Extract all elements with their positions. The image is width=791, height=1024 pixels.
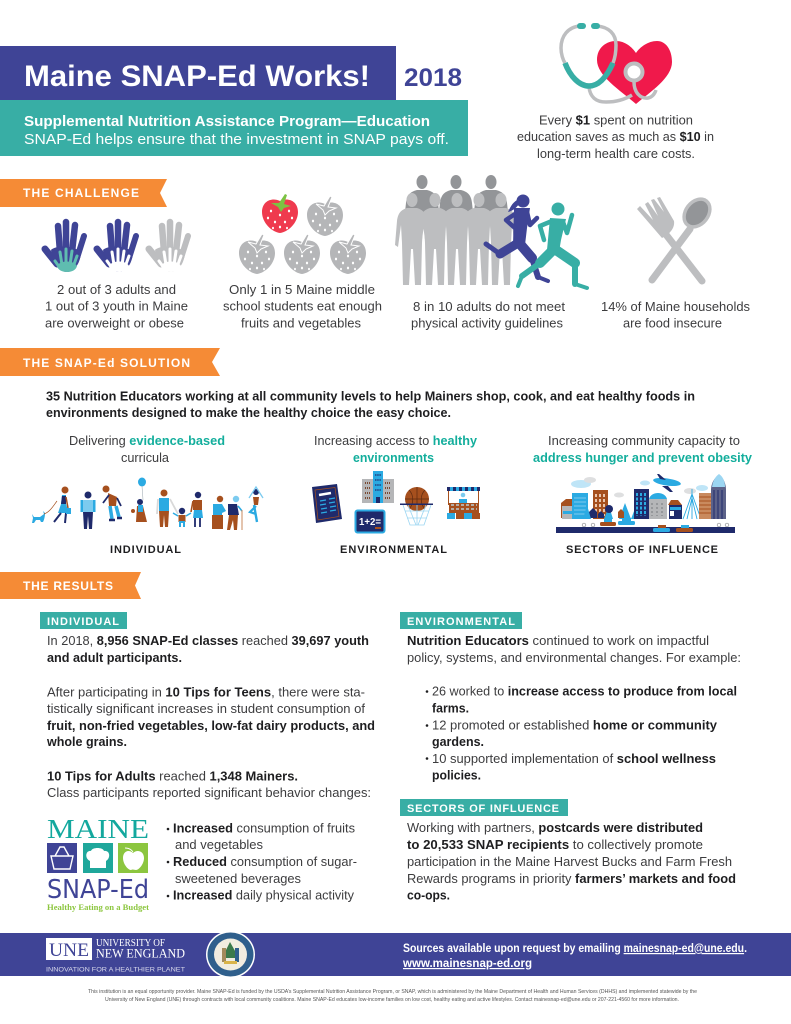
logo: University of New England: INNOVATION FOR A HEALTHIER PLANET [46, 967, 185, 974]
school building [362, 471, 394, 503]
text: class reach: and adult participants. [47, 651, 182, 665]
icon: strawberries [239, 194, 366, 274]
girl with balloon [131, 478, 147, 522]
text: postcards [407, 821, 736, 902]
caption: overweight: 1 out of 3 youth in Maine [45, 300, 188, 314]
text: teens program: tistically significant increases in student consumption of [47, 702, 366, 716]
logo: University of New England: UNE [49, 940, 89, 961]
list: environmental examples: policies. [432, 768, 481, 782]
title banner [0, 46, 396, 100]
text: postcards: participation in the Maine Harvest Bucks and Farm Fresh [407, 855, 732, 869]
column heading: environmental: Increasing access to healthy [314, 434, 477, 448]
solution intro text: 35 Nutrition Educators working at all community levels to help Mainers shop, cook, and eat healthy foods in [46, 390, 695, 404]
caption: food insecurity: 14% of Maine households [601, 300, 750, 314]
list: behavior changes [167, 822, 357, 902]
caption: fruits and vegetables: Only 1 in 5 Maine middle [229, 283, 375, 297]
elderly woman [212, 496, 226, 529]
caption: overweight: are overweight or obese [45, 316, 184, 330]
boy [80, 492, 96, 529]
list: behavior changes: Reduced consumption of sugar- [173, 855, 357, 869]
tag: environmental [400, 612, 522, 629]
panel: sectors of influence results [400, 799, 736, 902]
callout: return on investment: education saves as much as $10 in [517, 130, 714, 144]
vehicles [582, 518, 729, 527]
tag: sectors of influence [400, 799, 568, 816]
caption: fruits and vegetables [223, 283, 382, 330]
list: environmental examples: farms. [432, 702, 469, 716]
dog [32, 511, 45, 523]
icon: inactive adults and runners [395, 175, 587, 288]
disclaimer text: This institution is an equal opportunity provider. Maine SNAP-Ed is funded by the USDA’s Supplemental Nutrition Assistance Program, or SNAP, which is administered by the Maine Department of Health and Human Services (DHHS) and implemented statewide by the [88, 989, 697, 995]
menu [312, 484, 342, 523]
road [556, 527, 735, 533]
icon: fork and spoon [637, 192, 718, 281]
logo: Maine SNAP-Ed: MAINE [47, 814, 149, 844]
caption: fruits and vegetables: school students eat enough [223, 300, 382, 314]
elderly man with cane [227, 496, 242, 530]
column heading: sectors of influence: address hunger and prevent obesity [533, 451, 752, 465]
callout: return on investment: long-term health care costs. [537, 147, 695, 161]
basketball and hoop [400, 487, 433, 525]
caption: food insecurity [601, 300, 750, 331]
text: class reach [47, 634, 369, 665]
illustration: people of all ages [32, 478, 263, 530]
section banner: the challenge: THE CHALLENGE [23, 186, 139, 200]
label: individual: INDIVIDUAL [110, 544, 181, 556]
seal: Maine DHHS [206, 931, 255, 978]
section banner: the challenge [0, 179, 167, 207]
panel: environmental results [400, 612, 741, 782]
text: teens program: After participating in 10 Tips for Teens , there were sta- [47, 686, 365, 700]
title banner: Maine SNAP-Ed Works! [24, 60, 370, 93]
panel: individual results [40, 612, 375, 912]
text: teens program [46, 686, 375, 749]
text: sources: Sources available upon request by emailing mainesnap-ed@une.edu. [403, 941, 747, 955]
market stand [447, 487, 480, 519]
illustration: environments [312, 471, 480, 532]
text: teens program: fruit, non-fried vegetables, low-fat dairy products, and [47, 719, 375, 733]
text: adults program [47, 770, 371, 800]
column heading: individual: Delivering evidence-based [69, 434, 225, 448]
list: behavior changes: sweetened beverages [175, 872, 301, 886]
list: environmental examples: gardens. [432, 735, 484, 749]
text: postcards: Rewards programs in priority farmers’ markets and food [407, 872, 736, 886]
list: environmental examples: 12 promoted or established home or community [432, 718, 717, 732]
airplane [653, 477, 681, 487]
illustration: city skyline [556, 474, 735, 533]
column heading: environmental [314, 434, 477, 465]
text: adults program: Class participants reported significant behavior changes: [47, 786, 371, 800]
text: sources: www.mainesnap-ed.org [402, 956, 532, 970]
skater [102, 486, 122, 520]
list: behavior changes: and vegetables [175, 838, 263, 852]
subtitle banner [0, 100, 468, 156]
caption: food insecurity: are food insecure [623, 317, 722, 331]
cars on road [653, 525, 693, 532]
section banner: the results: THE RESULTS [23, 579, 113, 593]
column heading: sectors of influence: Increasing community capacity to [548, 434, 740, 448]
caption: physical activity: 8 in 10 adults do not meet [413, 300, 566, 314]
section banner: the results [0, 572, 141, 599]
footer band [0, 931, 791, 978]
column heading: sectors of influence [533, 434, 752, 465]
text: environmental intro: policy, systems, and environmental changes. For example: [407, 651, 741, 665]
subtitle banner: SNAP-Ed helps ensure that the investment in SNAP pays off. [24, 131, 449, 148]
caption: physical activity: physical activity guidelines [411, 317, 563, 331]
solution intro text [46, 390, 695, 420]
column heading: individual [69, 434, 225, 465]
text: class reach: In 2018, 8,956 SNAP-Ed classes reached 39,697 youth [47, 634, 369, 648]
icon: heart and stethoscope [561, 23, 672, 104]
logo: University of New England [46, 938, 185, 974]
logo: Maine SNAP-Ed: SNAP-Ed [47, 875, 149, 905]
label: sectors of influence: SECTORS OF INFLUENCE [566, 544, 718, 556]
text: teens program: whole grains. [46, 735, 127, 749]
callout: return on investment: Every $1 spent on nutrition [539, 114, 693, 128]
caption: overweight: 2 out of 3 adults and [57, 283, 176, 297]
section banner: the SNAP-Ed solution: THE SNAP-Ed SOLUTION [23, 356, 190, 370]
tag: environmental: ENVIRONMENTAL [407, 616, 515, 628]
column heading: individual: curricula [121, 451, 169, 465]
chalkboard: 1+2= [359, 517, 381, 528]
year: 2018 [404, 64, 462, 92]
text: sources [402, 941, 747, 970]
yoga figure [249, 487, 263, 522]
icon: hands overweight statistic [45, 222, 188, 272]
subtitle banner: Supplemental Nutrition Assistance Program—Education [24, 113, 430, 130]
text: postcards: to 20,533 SNAP recipients to collectively promote [407, 838, 703, 852]
child holding hands [173, 508, 191, 527]
chalkboard [356, 510, 384, 532]
tag: individual: INDIVIDUAL [47, 616, 119, 628]
text: adults program: 10 Tips for Adults reached 1,348 Mainers. [47, 770, 298, 784]
text: postcards: Working with partners, postcards were distributed [407, 821, 703, 835]
column heading: environmental: environments [353, 451, 434, 465]
list: behavior changes: Increased consumption of fruits [173, 822, 355, 836]
houses and towers [561, 499, 574, 518]
father [157, 490, 178, 527]
text: environmental intro [407, 634, 741, 665]
list: environmental examples: 10 supported implementation of school wellness [432, 752, 716, 766]
disclaimer text: University of New England (UNE) through contracts with local community coalitions. Maine SNAP-Ed educates low-income families on low cost, healthy eating and active lifestyles. Contact mainesnap-ed@une.edu or 207-221-4560 for more information. [105, 997, 679, 1003]
text: postcards: co-ops. [407, 888, 450, 902]
caption: overweight [45, 283, 188, 330]
callout: return on investment [517, 114, 714, 161]
tag: sectors of influence: SECTORS OF INFLUENCE [407, 803, 559, 815]
caption: fruits and vegetables: fruits and vegetables [241, 316, 361, 330]
logo: Maine SNAP-Ed [47, 814, 149, 912]
logo: Maine SNAP-Ed: Healthy Eating on a Budget [47, 903, 149, 912]
solution intro text: environments designed to make the healthy choice the easy choice. [46, 406, 451, 420]
list: behavior changes: Increased daily physical activity [173, 888, 355, 902]
list: environmental examples [426, 685, 737, 782]
caption: physical activity [411, 300, 566, 331]
mother [191, 492, 203, 527]
section banner: the SNAP-Ed solution [0, 348, 220, 376]
logo: University of New England: NEW ENGLAND [96, 946, 185, 961]
walking woman [54, 486, 71, 523]
list: environmental examples: 26 worked to increase access to produce from local [432, 685, 737, 699]
text: environmental intro: Nutrition Educators continued to work on impactful [407, 634, 709, 648]
logo: University of New England: UNIVERSITY OF [96, 938, 165, 949]
label: environmental: ENVIRONMENTAL [340, 544, 447, 556]
tag: individual [40, 612, 127, 629]
disclaimer text [88, 989, 697, 1003]
